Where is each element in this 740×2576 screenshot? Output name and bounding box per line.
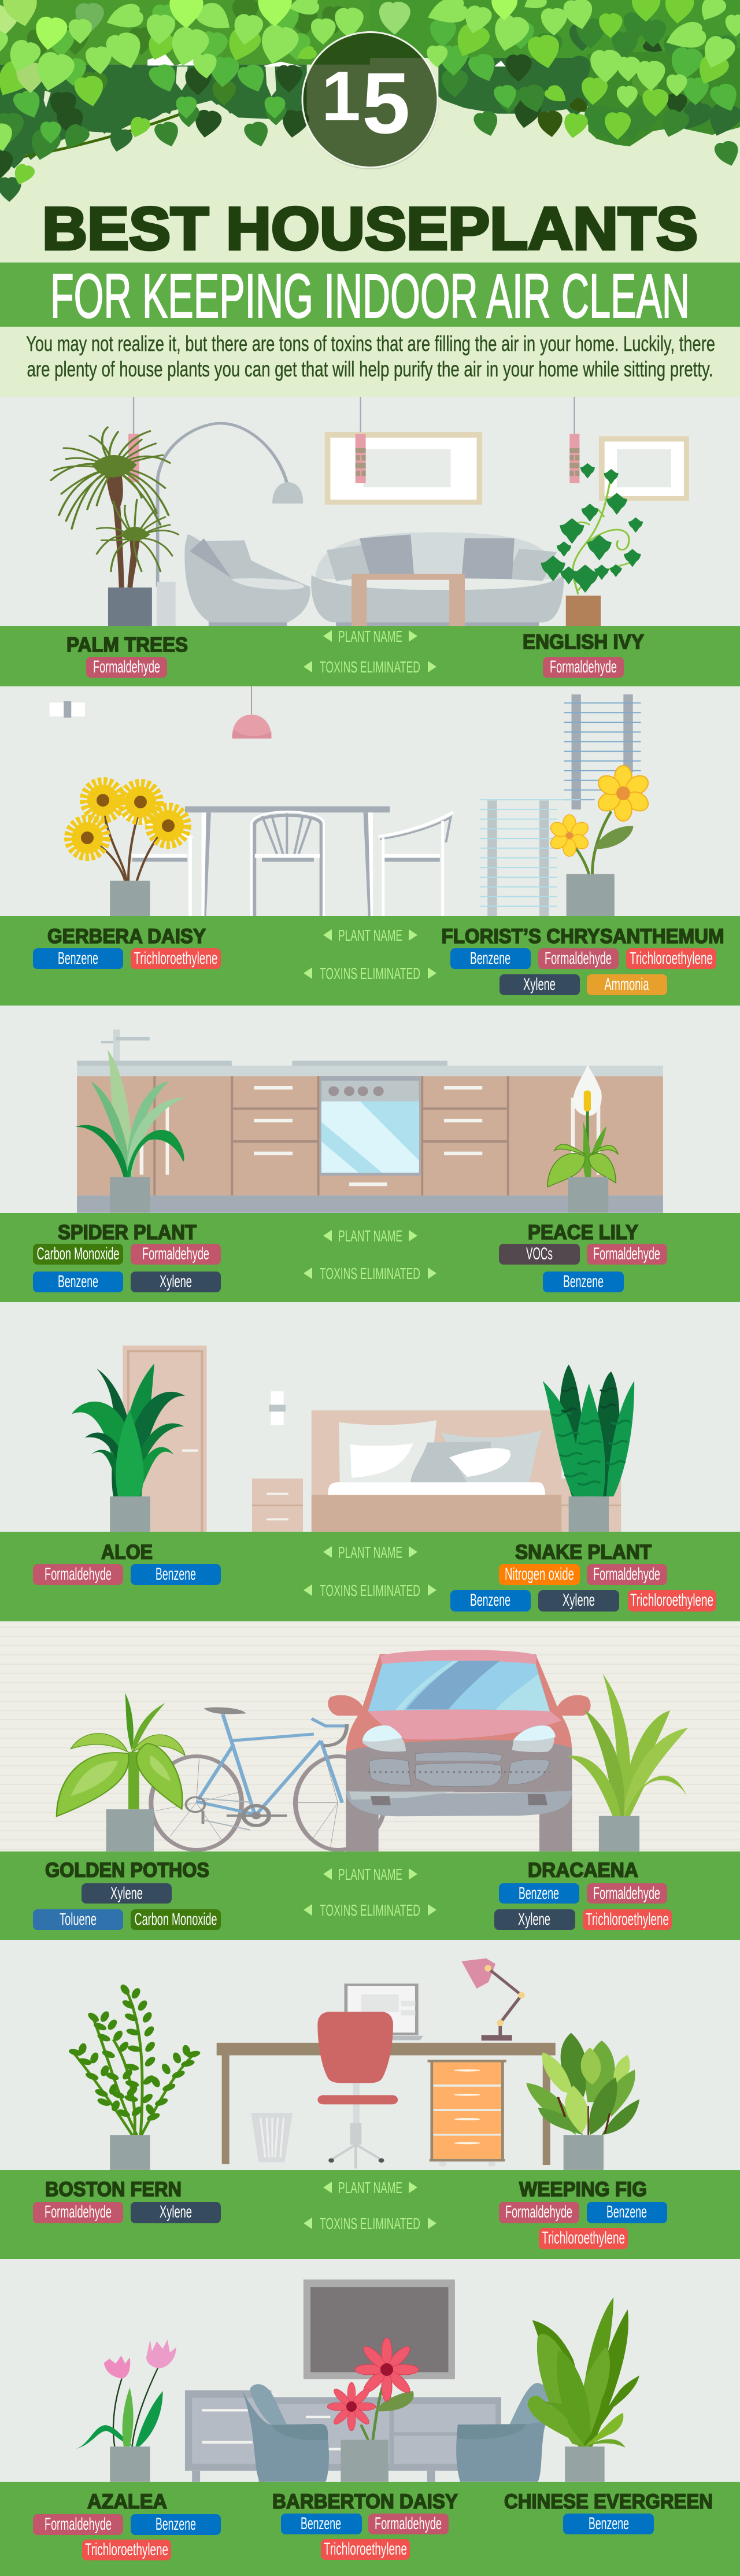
icon: azalea (76, 2340, 176, 2482)
tag: Formaldehyde: Formaldehyde (375, 2514, 442, 2533)
intro text (26, 332, 715, 381)
tag: Xylene (131, 2202, 221, 2223)
tag: Benzene: Benzene (589, 2514, 629, 2533)
legend: toxins eliminated (304, 1265, 436, 1283)
tag: Benzene (131, 2514, 221, 2535)
panel: bedroom (0, 1302, 740, 1621)
plant name: peace lily: PEACE LILY (528, 1221, 638, 1244)
tag: Formaldehyde (499, 2202, 579, 2223)
tag: Trichloroethylene: Trichloroethylene (134, 949, 217, 968)
tag: Benzene (563, 2514, 654, 2534)
panel: lounge (0, 2259, 740, 2576)
legend: plant name: PLANT NAME (338, 627, 402, 645)
tag: Trichloroethylene (539, 2228, 628, 2249)
legend: toxins eliminated: TOXINS ELIMINATED (320, 964, 420, 982)
icon: barberton daisy (327, 2338, 419, 2482)
icon: dracaena (567, 1673, 688, 1851)
tag: Xylene (538, 1590, 619, 1612)
tag: Xylene (82, 1883, 172, 1904)
panel: header (0, 0, 740, 399)
band (0, 1851, 740, 1940)
tag: Formaldehyde: Formaldehyde (593, 1884, 660, 1903)
legend: plant name: PLANT NAME (338, 1865, 402, 1883)
legend: plant name (323, 2179, 417, 2197)
tag: Benzene (543, 1272, 624, 1292)
tag: Formaldehyde (587, 1564, 667, 1585)
tag: Formaldehyde: Formaldehyde (45, 1565, 112, 1584)
band (0, 626, 740, 686)
tag: Formaldehyde: Formaldehyde (593, 1244, 660, 1263)
tag: Xylene: Xylene (160, 2202, 192, 2222)
tag: Formaldehyde: Formaldehyde (550, 657, 617, 677)
tag: Formaldehyde (33, 2202, 123, 2223)
scene: kitchen cabinets and oven (77, 1030, 663, 1213)
tag: Benzene: Benzene (519, 1884, 559, 1903)
legend: plant name (323, 627, 417, 645)
tag: Trichloroethylene: Trichloroethylene (542, 2228, 625, 2248)
tag: Formaldehyde (86, 657, 167, 678)
legend: plant name: PLANT NAME (338, 2179, 402, 2197)
panel: office (0, 1940, 740, 2259)
plant name: boston fern: BOSTON FERN (45, 2178, 182, 2201)
tag: Xylene (131, 1272, 221, 1292)
icon: peace lily (547, 1065, 618, 1213)
tag: Nitrogen oxide (499, 1564, 580, 1585)
scene: living room furniture (128, 397, 689, 626)
plant name: snake plant: SNAKE PLANT (515, 1541, 652, 1564)
icon: chinese evergreen (528, 2297, 639, 2482)
foliage canopy: right half (370, 0, 740, 168)
tag: Xylene (500, 974, 580, 995)
tag: Xylene: Xylene (160, 1272, 192, 1291)
tag: Carbon Monoxide: Carbon Monoxide (134, 1910, 217, 1929)
legend: toxins eliminated (304, 658, 436, 676)
tag: Toluene (33, 1909, 123, 1930)
icon: gerbera daisy (72, 785, 184, 916)
badge: 15 (302, 32, 439, 169)
legend: toxins eliminated (304, 2215, 436, 2233)
icon: boston fern (68, 1983, 201, 2170)
tag: Formaldehyde (33, 2514, 123, 2535)
tag: Carbon Monoxide: Carbon Monoxide (37, 1244, 119, 1263)
tag: Benzene: Benzene (58, 1272, 98, 1291)
tag: Benzene (33, 1272, 123, 1292)
tag: Trichloroethylene: Trichloroethylene (586, 1910, 669, 1929)
tag: Formaldehyde (538, 948, 619, 969)
legend: plant name (323, 1865, 417, 1883)
legend: plant name: PLANT NAME (338, 1543, 402, 1561)
tag: Formaldehyde (587, 1244, 667, 1265)
panel: kitchen (0, 1006, 740, 1302)
legend: toxins eliminated (304, 964, 436, 982)
plant name: barberton daisy: BARBERTON DAISY (272, 2490, 458, 2513)
icon: english ivy (541, 463, 643, 626)
tag: Benzene (499, 1883, 579, 1904)
legend: plant name: PLANT NAME (338, 926, 402, 944)
tag: Formaldehyde: Formaldehyde (93, 657, 160, 677)
tag: Formaldehyde (587, 1883, 667, 1904)
icon: golden pothos (57, 1693, 185, 1851)
foliage canopy: left half (0, 0, 370, 202)
icon: snake plant (543, 1365, 634, 1532)
plant name: english ivy: ENGLISH IVY (523, 631, 644, 653)
panel: garage (0, 1621, 740, 1940)
tag: Trichloroethylene (321, 2539, 410, 2560)
tag: Carbon Monoxide (33, 1244, 123, 1265)
icon: weeping fig (526, 2033, 639, 2170)
plant name: palm trees: PALM TREES (66, 634, 188, 656)
tag: Formaldehyde (33, 1564, 123, 1585)
title: BEST HOUSEPLANTS (42, 195, 698, 263)
scene: desk and office furniture (217, 1958, 556, 2168)
icon: bicycle (151, 1708, 384, 1850)
icon: car (328, 1650, 591, 1851)
tag: Toluene: Toluene (60, 1910, 97, 1929)
tag: Xylene: Xylene (523, 975, 556, 994)
tag: Benzene (131, 1564, 221, 1585)
tag: Trichloroethylene: Trichloroethylene (85, 2540, 168, 2559)
legend: toxins eliminated: TOXINS ELIMINATED (320, 1901, 420, 1919)
tag: Trichloroethylene (131, 948, 221, 969)
legend: toxins eliminated: TOXINS ELIMINATED (320, 2215, 420, 2233)
tag: Formaldehyde: Formaldehyde (545, 949, 612, 968)
legend: toxins eliminated: TOXINS ELIMINATED (320, 658, 420, 676)
tag: Formaldehyde: Formaldehyde (142, 1244, 209, 1263)
plant name: chinese evergreen: CHINESE EVERGREEN (504, 2490, 713, 2513)
panel: living room (0, 397, 740, 686)
plant name: golden pothos: GOLDEN POTHOS (45, 1859, 209, 1882)
band (0, 2482, 740, 2576)
legend: plant name (323, 926, 417, 944)
band (0, 2170, 740, 2259)
tag: Formaldehyde (368, 2514, 449, 2534)
tag: VOCs: VOCs (526, 1244, 553, 1263)
tag: Benzene: Benzene (156, 1565, 196, 1584)
tag: Benzene: Benzene (563, 1272, 604, 1291)
tag: Carbon Monoxide (131, 1909, 221, 1930)
tag: Trichloroethylene: Trichloroethylene (324, 2540, 407, 2559)
tag: Ammonia (587, 974, 667, 995)
band (0, 1213, 740, 1302)
tag: Benzene: Benzene (58, 949, 98, 968)
icon: palm trees (51, 427, 179, 626)
tag: Formaldehyde: Formaldehyde (505, 2202, 572, 2222)
tag: Benzene (450, 1590, 531, 1612)
plant name: gerbera daisy: GERBERA DAISY (47, 925, 206, 948)
badge: 15: 1 (321, 57, 361, 135)
legend: plant name: PLANT NAME (338, 1227, 402, 1245)
icon: florist's chrysanthemum (548, 766, 652, 916)
tag: Formaldehyde (543, 657, 624, 678)
plant name: spider plant: SPIDER PLANT (58, 1221, 197, 1244)
tag: Xylene (494, 1909, 575, 1930)
legend: toxins eliminated (304, 1901, 436, 1919)
tag: Benzene: Benzene (470, 949, 510, 968)
tag: Benzene (281, 2514, 362, 2534)
panel: dining room (0, 686, 740, 1006)
tag: Xylene: Xylene (563, 1591, 595, 1610)
tag: Xylene: Xylene (110, 1884, 143, 1903)
legend: plant name (323, 1543, 417, 1561)
legend: toxins eliminated (304, 1581, 436, 1599)
plant name: aloe: ALOE (101, 1541, 153, 1564)
tag: Xylene: Xylene (518, 1910, 550, 1929)
icon: spider plant (76, 1050, 186, 1213)
plant name: weeping fig: WEEPING FIG (519, 2178, 647, 2201)
band (0, 916, 740, 1006)
tag: Benzene (450, 948, 531, 969)
legend: toxins eliminated: TOXINS ELIMINATED (320, 1581, 420, 1599)
scene: dining furniture (50, 686, 641, 916)
tag: Benzene: Benzene (156, 2515, 196, 2534)
scene: bedroom furniture (123, 1346, 621, 1532)
scene: tv, sideboard and armchairs (185, 2279, 553, 2482)
icon: aloe (72, 1363, 185, 1532)
tag: Trichloroethylene (583, 1909, 672, 1930)
tag: Formaldehyde: Formaldehyde (593, 1565, 660, 1584)
plant name: dracaena: DRACAENA (528, 1859, 638, 1882)
tag: Formaldehyde: Formaldehyde (45, 2202, 112, 2222)
band (0, 1532, 740, 1621)
badge: 15: 5 (362, 54, 410, 151)
tag: VOCs (499, 1244, 580, 1265)
tag: Benzene (587, 2202, 667, 2223)
tag: Nitrogen oxide: Nitrogen oxide (505, 1565, 574, 1584)
tag: Benzene: Benzene (606, 2202, 647, 2222)
plant name: florist's chrysanthemum: FLORIST’S CHRYSANTHEMUM (442, 925, 724, 948)
tag: Formaldehyde: Formaldehyde (45, 2515, 112, 2534)
legend: plant name (323, 1227, 417, 1245)
legend: toxins eliminated: TOXINS ELIMINATED (320, 1265, 420, 1283)
plant name: azalea: AZALEA (87, 2490, 167, 2513)
tag: Benzene: Benzene (301, 2514, 341, 2533)
tag: Formaldehyde (131, 1244, 221, 1265)
tag: Ammonia: Ammonia (605, 975, 649, 994)
tag: Benzene: Benzene (470, 1591, 510, 1610)
tag: Benzene (33, 948, 123, 969)
tag: Trichloroethylene (82, 2540, 171, 2560)
